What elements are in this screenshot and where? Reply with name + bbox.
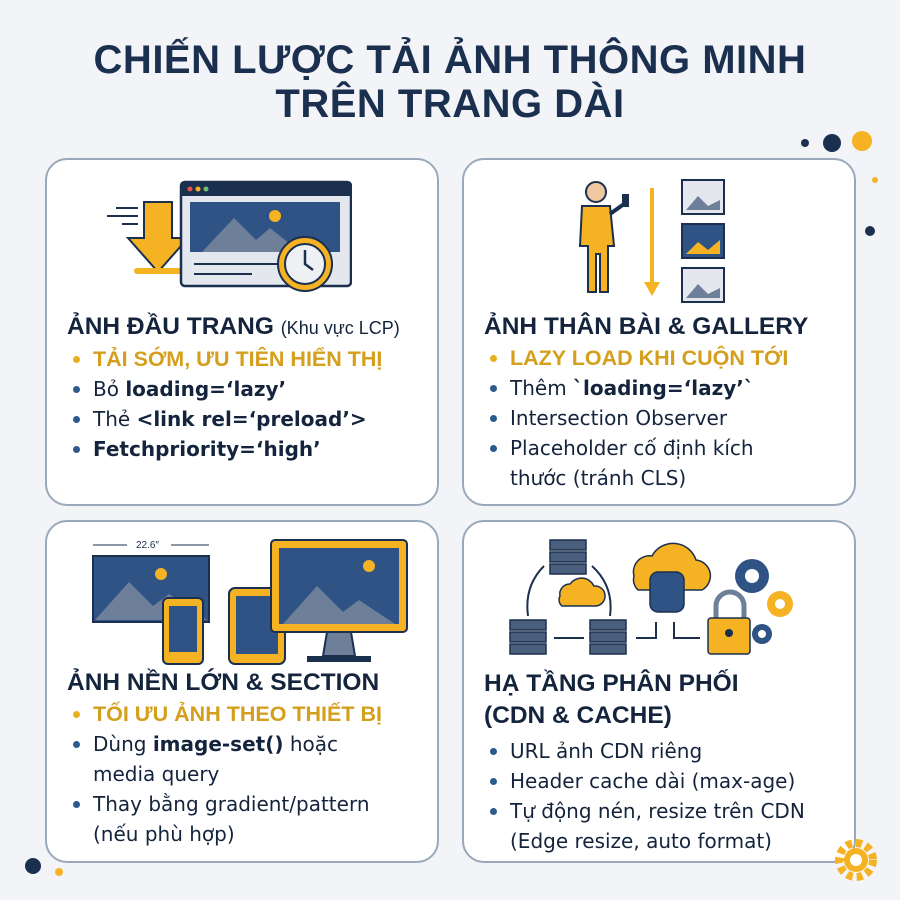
panel: header image bbox=[45, 158, 439, 506]
text: body gallery: Placeholder cố định kích thước (tránh CLS) bbox=[510, 436, 754, 490]
decorative dots bottom-left bbox=[25, 858, 63, 876]
text: header image: ẢNH ĐẦU TRANG (Khu vực LCP) bbox=[67, 313, 400, 340]
icon: browser with download & clock bbox=[107, 180, 352, 292]
icon: responsive devices bbox=[92, 539, 408, 665]
icon: gear bottom-right bbox=[835, 839, 877, 881]
icon: responsive devices: 22.6″ bbox=[136, 540, 159, 551]
text: body gallery bbox=[484, 312, 808, 490]
text: CDN infrastructure: Tự động nén, resize trên CDN (Edge resize, auto format) bbox=[510, 799, 805, 853]
text: header image: Bỏ loading=‘lazy’ bbox=[93, 377, 286, 401]
title: TRÊN TRANG DÀI bbox=[275, 82, 625, 126]
text: CDN infrastructure: (CDN & CACHE) bbox=[484, 702, 672, 729]
title bbox=[94, 37, 806, 126]
icon: person scrolling with gallery bbox=[578, 179, 725, 303]
text: large backgrounds: ẢNH NỀN LỚN & SECTION bbox=[67, 669, 379, 696]
icon: servers cloud lock gears bbox=[509, 539, 793, 655]
text: CDN infrastructure: HẠ TẦNG PHÂN PHỐI bbox=[484, 670, 739, 697]
text: header image bbox=[67, 312, 400, 461]
text: large backgrounds: TỐI ƯU ẢNH THEO THIẾT BỊ bbox=[93, 702, 382, 726]
panel: CDN infrastructure bbox=[462, 520, 856, 863]
text: header image: Fetchpriority=‘high’ bbox=[93, 437, 321, 461]
text: large backgrounds: Thay bằng gradient/pattern (nếu phù hợp) bbox=[93, 792, 370, 846]
text: body gallery: Intersection Observer bbox=[510, 406, 727, 430]
text: large backgrounds bbox=[67, 668, 382, 846]
panel: large backgrounds bbox=[45, 520, 439, 863]
text: CDN infrastructure: URL ảnh CDN riêng bbox=[510, 739, 702, 763]
text: CDN infrastructure bbox=[484, 669, 805, 853]
text: CDN infrastructure: Header cache dài (max-age) bbox=[510, 769, 795, 793]
decorative dots bbox=[801, 131, 878, 236]
text: header image: Thẻ <link rel=‘preload’> bbox=[93, 407, 367, 431]
text: large backgrounds: Dùng image-set() hoặc media query bbox=[93, 732, 338, 786]
title: CHIẾN LƯỢC TẢI ẢNH THÔNG MINH bbox=[94, 38, 806, 82]
panel: body gallery bbox=[462, 158, 856, 506]
text: body gallery: Thêm `loading=‘lazy’` bbox=[510, 376, 754, 400]
text: body gallery: ẢNH THÂN BÀI & GALLERY bbox=[484, 313, 808, 340]
text: header image: TẢI SỚM, ƯU TIÊN HIỂN THỊ bbox=[93, 347, 382, 371]
text: body gallery: LAZY LOAD KHI CUỘN TỚI bbox=[510, 346, 788, 370]
